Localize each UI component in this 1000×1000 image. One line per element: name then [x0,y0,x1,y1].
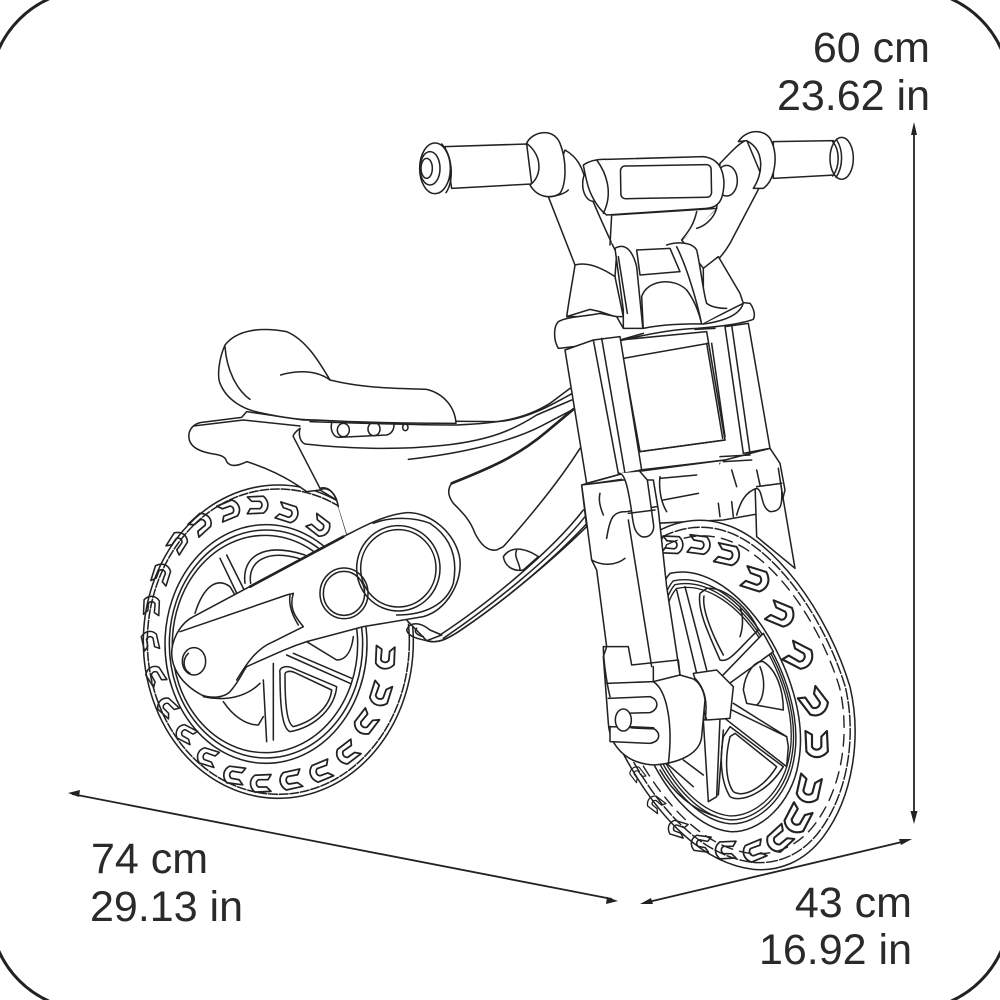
width label: 16.92 in [759,926,912,974]
width arrow [640,839,912,904]
right fork lower leg [755,480,795,568]
right handlebar riser [682,140,763,268]
handlebar pad [583,157,737,245]
width label: 43 cm [795,879,912,927]
height arrow [910,122,918,824]
fork crown [555,243,754,348]
centre fork panel [620,332,725,452]
swing arm with holes [172,513,460,699]
fork brace [582,448,785,527]
left grip [420,133,568,197]
right grip [738,132,853,188]
right fork clamp [732,463,782,515]
seat [219,329,456,423]
balance bike illustration [141,132,855,870]
left fork lower leg and axle housing [582,463,782,765]
right fork leg [725,323,770,453]
handlebars and upper fork [420,132,853,527]
left fork leg [565,337,642,483]
left handlebar riser [548,150,617,277]
height label: 23.62 in [777,72,930,120]
height label: 60 cm [813,24,930,72]
length label: 74 cm [91,835,208,883]
rear wheel [141,485,413,798]
length label: 29.13 in [90,883,243,931]
length arrow [68,790,618,904]
frame and rear fender [189,329,590,642]
front wheel [606,520,855,870]
